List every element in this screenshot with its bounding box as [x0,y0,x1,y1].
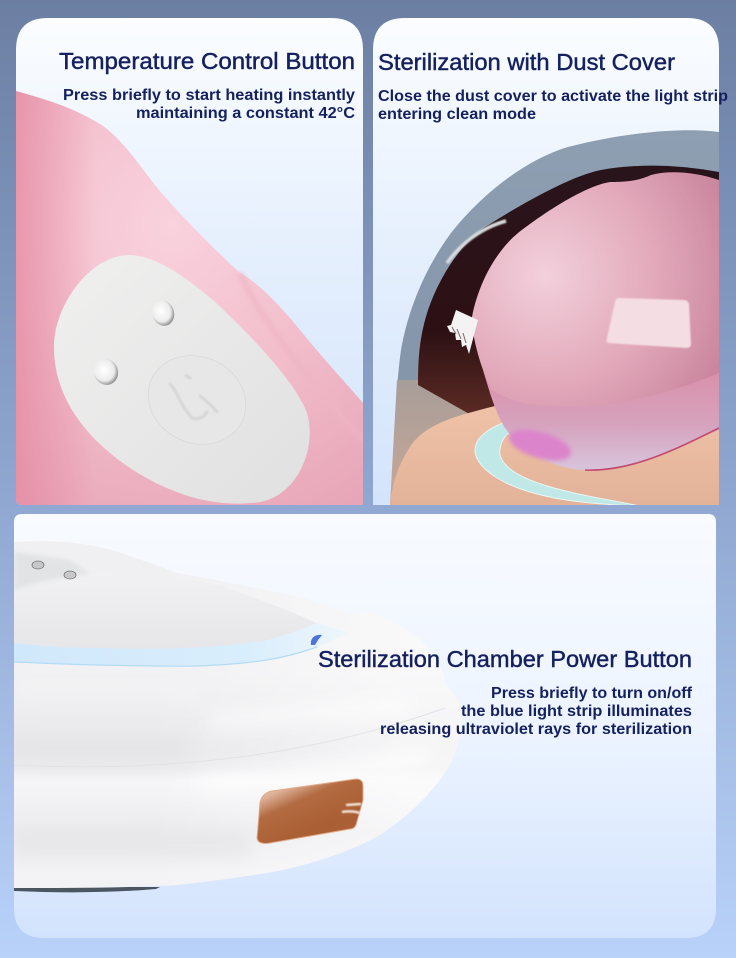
cover reflection [447,221,506,263]
dust cover shell [398,130,719,380]
lobe surface around contacts [14,553,85,588]
cyan light ring [475,423,640,506]
metal contact upper [152,300,174,326]
copper power button [257,779,363,843]
description: Press briefly to start heating instantly [63,87,355,104]
description: entering clean mode [378,106,536,123]
description: Press briefly to turn on/off [491,685,693,702]
heading: Sterilization Chamber Power Button [318,646,692,672]
left edge shading [16,91,81,505]
pink device lower body [483,368,719,470]
white device body [14,573,474,889]
blue strip tip [311,635,322,645]
panel: sterilization chamber power button [14,514,716,938]
control plate [54,255,310,504]
blue light strip [14,623,348,666]
panel: sterilization with dust cover [373,18,728,506]
heading: Sterilization with Dust Cover [378,49,675,75]
red edge of device [585,428,719,470]
description [63,87,355,122]
metal contact left [32,561,44,569]
rear lobe [14,542,176,574]
heading: Temperature Control Button [59,48,355,74]
description [380,685,693,738]
inner dome [14,606,316,648]
temperature button circle [148,356,246,444]
description: maintaining a constant 42°C [136,105,355,122]
comb detail [447,310,478,354]
icon: embossed logo [170,376,217,419]
white contact plate [607,298,691,348]
magenta glow [506,428,572,462]
description: Close the dust cover to activate the light strip [378,88,728,105]
panel: temperature control button [16,18,363,505]
description [378,88,728,123]
metal contact lower [94,360,118,385]
lower transparent cover [390,380,468,504]
pink device upper body [472,172,719,407]
rear lobe shading [239,271,264,316]
dark interior [418,166,719,440]
base platform [390,400,719,505]
metal contact right [64,571,76,579]
description: the blue light strip illuminates [461,703,692,720]
strip lower edge [14,647,317,666]
description: releasing ultraviolet rays for sterilization [380,721,692,738]
dark base sliver [14,887,160,892]
pink device body [16,91,363,505]
